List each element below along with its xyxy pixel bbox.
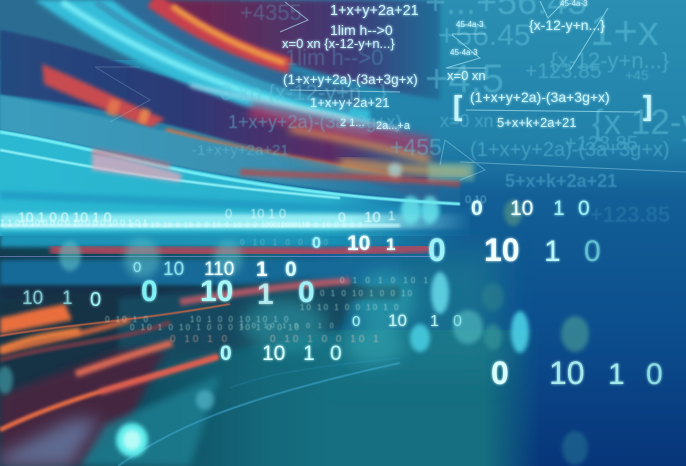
binary digits: bright foreground rows: 0 — [141, 275, 158, 308]
binary digits: thin row along the bright band: 1 1 0 0 10 0 0 0 0 10 0 0 0 10 0 1 0 1 — [0, 218, 148, 228]
binary digits: bright foreground rows: 1 — [430, 313, 439, 330]
binary digits: bright foreground rows: 10 — [262, 342, 285, 365]
binary digits: small out-of-focus rows: 0 1 0 10 1 0 0 10 — [320, 289, 414, 298]
math formulas: bright foreground layer — [282, 0, 652, 132]
math formulas: bright foreground layer: 1lim h-->0 — [330, 22, 393, 38]
binary digits: bright foreground rows: 1 — [386, 235, 395, 254]
binary digits: bright foreground rows: 1 — [257, 278, 274, 311]
binary digits: small out-of-focus rows: 10 10 1 0 0 10 1 0 — [300, 303, 400, 312]
binary digits: bright foreground rows: 1 — [544, 235, 561, 268]
math formulas: faint background layer: +123.85 — [525, 60, 602, 83]
binary digits: small out-of-focus rows: 0 10 1 0 0 1 0 — [240, 238, 331, 247]
binary digits: bright foreground rows: 110 — [204, 259, 234, 280]
math formulas: bright foreground layer: 2a...+a — [376, 120, 411, 132]
binary digits: bright foreground rows: 1 — [608, 358, 625, 391]
binary digits: bright foreground rows: 0 — [584, 235, 601, 268]
binary digits: bright foreground rows: 10 — [388, 311, 407, 330]
binary digits: bright foreground rows: 10 — [510, 197, 533, 220]
math formulas: bright foreground layer: x=0 xn — [447, 68, 486, 83]
binary digits: thin row along the bright band: 0 10 — [465, 194, 486, 206]
light streaks: upper curved bands — [0, 0, 470, 236]
binary digits: thin row along the bright band: 0 0 10 0 10 0 10 0 0 0 0 — [265, 222, 363, 229]
math formulas: faint background layer: +56.45 — [438, 19, 531, 52]
binary digits: bright foreground rows: 0 — [578, 197, 590, 220]
math formulas: bright foreground layer: 5+x+k+2a+21 — [497, 115, 577, 130]
light streaks: lower red and orange bands — [0, 280, 400, 466]
binary digits: bright foreground rows: 10 — [22, 288, 43, 309]
binary digits: bright foreground rows: 0 — [471, 197, 483, 220]
math formulas: bright foreground layer: ] — [643, 90, 652, 121]
math formulas: bright foreground layer: [ — [453, 90, 462, 121]
binary digits: bright foreground rows: 10 — [549, 355, 585, 391]
binary digits: small out-of-focus rows: 0 10 1 0 — [170, 334, 230, 345]
math formulas: bright foreground layer: (1+x+y+2a)-(3a+3g+x) — [283, 72, 418, 87]
math formulas: faint background layer: +455 — [390, 134, 442, 160]
binary digits: bright foreground rows: 0 — [491, 355, 509, 391]
binary digits: thin row along the bright band: 10 — [364, 209, 381, 226]
binary digits: small out-of-focus rows: 0 10 1 0 10 1 0 0 0 10 1 0 0 10 — [130, 323, 301, 332]
math formulas: faint background layer: +45 — [625, 67, 649, 83]
binary digits: small out-of-focus rows: 10 1 0 0 10 10 1 0 — [190, 315, 290, 324]
math formulas: faint background layer: +123.85 — [565, 133, 638, 155]
binary digits: bright foreground rows: 1 — [256, 258, 268, 281]
math formulas: bright foreground layer: 45-4a-3 — [456, 20, 484, 29]
binary digits: small out-of-focus rows: 0 10 1 0 0 10 1 — [270, 334, 382, 345]
math formulas: faint background layer: (1+x+y+2a)-(3a+3g+x) — [470, 139, 670, 161]
math formulas: faint background layer — [192, 0, 686, 227]
binary digits: bright foreground rows — [22, 197, 663, 391]
math formulas: faint background layer: x=0 xn — [440, 111, 494, 131]
math formulas: faint background layer: 0 xn {x-12-y+n...} — [220, 80, 387, 105]
binary digits: thin row along the bright band: 0 — [338, 209, 346, 225]
math formulas: bright foreground layer: 1+x+y+2a+21 — [330, 3, 419, 19]
binary digits: bright foreground rows: 0 — [646, 358, 663, 391]
math formulas: faint background layer: +4.5 — [425, 57, 504, 101]
math formulas: bright foreground layer: {x-12-y+n...} — [529, 17, 605, 33]
math formulas: faint background layer: -1+x+y+2a+21 — [192, 142, 289, 159]
binary digits: bright foreground rows: 0 — [90, 289, 101, 311]
binary digits: bright foreground rows: 0 — [285, 258, 297, 281]
math formulas: faint background layer: 5+x+k+2a+21 — [505, 171, 617, 191]
binary digits: bright foreground rows: 10 — [484, 232, 520, 268]
math formulas: bright foreground layer: 1+x+y+2a+21 — [310, 95, 390, 110]
math formulas: bright foreground layer: x=0 xn {x-12-y+n...} — [282, 36, 395, 51]
binary digits: bright foreground rows: 0 — [133, 259, 141, 276]
math formulas: bright foreground layer: 45-4a-3 — [450, 48, 478, 57]
binary digits: thin row along the bright band: 1 — [388, 208, 395, 223]
math formulas: bright foreground layer: (1+x+y+2a)-(3a+3g+x) — [470, 89, 610, 105]
binary digits: small out-of-focus rows — [105, 238, 431, 345]
binary digits: bright foreground rows: 0 — [298, 276, 315, 309]
binary digits: bright foreground rows: 0 — [220, 342, 232, 365]
binary digits: bright foreground rows: 0 — [312, 235, 321, 252]
math formulas: bright foreground layer: 2 1... — [340, 117, 364, 129]
binary digits: small out-of-focus rows: 0 1 0 1 0 10 1 — [340, 276, 431, 285]
binary digits: bright foreground rows: 10 — [163, 259, 184, 280]
math formulas: faint background layer: 1+x — [590, 7, 659, 54]
math formulas: faint background layer: 1lim h-->0 — [285, 45, 383, 70]
math formulas: faint background layer: {x-12-y+n...} — [550, 48, 669, 73]
binary digits: small out-of-focus rows: 0 10 1 0 — [105, 315, 150, 324]
math formulas: faint background layer: +4355 — [240, 0, 302, 25]
binary digits: bright foreground rows: 1 — [62, 288, 73, 309]
binary digits: thin row along the bright band: 0 — [225, 206, 232, 221]
math formulas: faint background layer: +123.85 — [590, 202, 670, 227]
blurred bokeh lights — [0, 163, 589, 465]
binary digits: bright foreground rows: 10 — [347, 232, 370, 255]
light streaks: middle bands — [0, 214, 470, 300]
binary digits: thin row along the bright band — [0, 194, 486, 229]
binary digits: bright foreground rows: 0 — [330, 342, 342, 365]
formula rules and sigma lines — [95, 1, 686, 180]
binary digits: bright foreground rows: 0 — [453, 313, 462, 330]
binary digits: bright foreground rows: 1 — [303, 342, 315, 365]
binary digits: bright foreground rows: 10 — [200, 275, 233, 308]
binary digits: thin row along the bright band: 10 1 0 0 10 1 0 — [18, 209, 112, 225]
binary digits: bright foreground rows: 1 — [553, 197, 565, 220]
binary digits: thin row along the bright band: 0 10 10 10 0 10 0 0 10 0 10 0 0 1 0 10 0 1 0 — [130, 222, 310, 229]
binary digits: thin row along the bright band: 10 1 0 — [250, 206, 286, 221]
binary digits: bright foreground rows: 0 — [352, 313, 360, 330]
binary digits: bright foreground rows: 0 — [428, 232, 446, 268]
binary digits: small out-of-focus rows: 1 0 10 1 0 0 1 0 — [240, 323, 337, 330]
math formulas: faint background layer: 1+x+y+2a)-(3a+3g+x) — [228, 112, 402, 132]
